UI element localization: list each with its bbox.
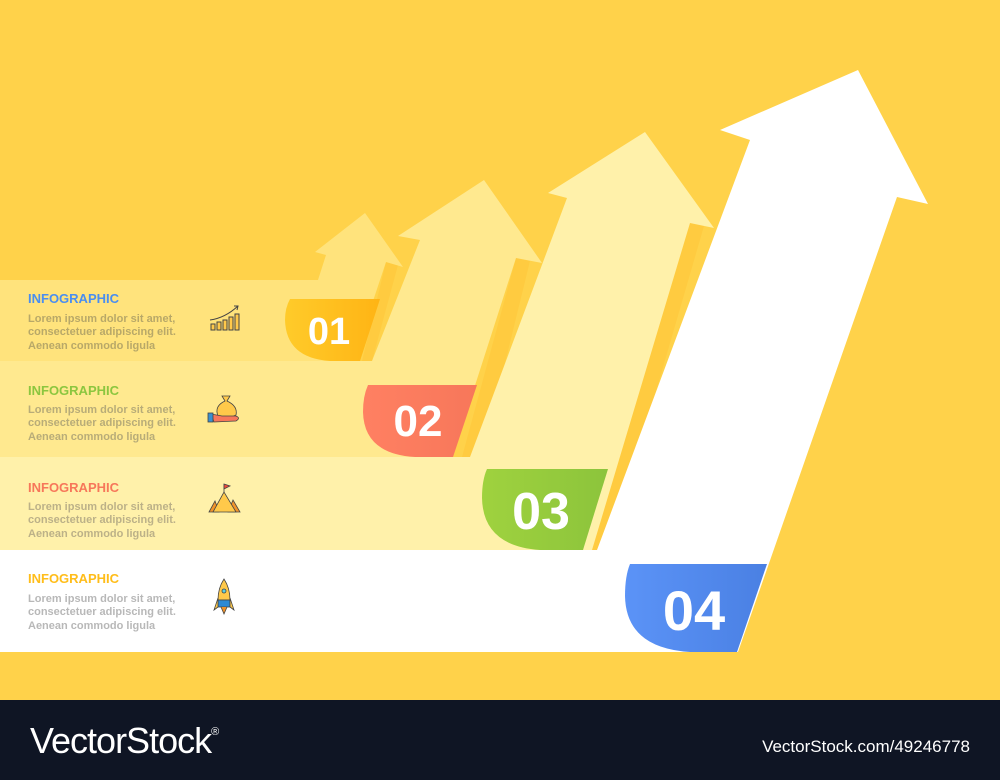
badge 02: 02 [394,397,442,446]
text block 4: INFOGRAPHIC [28,571,120,586]
badge 03 [482,469,608,550]
badge 01: 01 [308,311,350,353]
badge 04 [625,564,767,652]
text block 1: consectetuer adipiscing elit. [28,326,176,338]
footer bar: ® [211,726,219,738]
arrow 1 with band [0,213,403,361]
text block 3 [28,480,176,540]
badge 01 [285,299,380,361]
icon: growth chart [210,306,239,330]
badge 04: 04 [663,579,725,642]
arrow 4 with band [0,70,928,652]
icon: money bag in hand [208,396,238,422]
text block 4: Lorem ipsum dolor sit amet, [28,593,175,605]
text block 4: consectetuer adipiscing elit. [28,606,176,618]
text block 2: INFOGRAPHIC [28,383,120,398]
text block 2: Aenean commodo ligula [28,431,156,443]
text block 1: INFOGRAPHIC [28,291,120,306]
text block 3: consectetuer adipiscing elit. [28,514,176,526]
arrow 3 with band [0,132,714,550]
text block 4 [28,571,176,632]
text block 3: Lorem ipsum dolor sit amet, [28,501,175,513]
text block 2: Lorem ipsum dolor sit amet, [28,404,175,416]
footer bar: VectorStock [30,720,211,761]
badge 03: 03 [512,483,570,541]
badge 02 [363,385,477,457]
footer bar: VectorStock.com/49246778 [762,737,970,756]
text block 3: INFOGRAPHIC [28,480,120,495]
icon: rocket [214,579,234,614]
text block 1 [28,291,176,352]
text block 2 [28,383,176,443]
text block 3: Aenean commodo ligula [28,528,156,540]
icon: mountain with flag [209,484,240,512]
text block 1: Lorem ipsum dolor sit amet, [28,313,175,325]
text block 2: consectetuer adipiscing elit. [28,417,176,429]
footer bar [0,700,1000,780]
arrow 2 with band [0,180,542,457]
text block 1: Aenean commodo ligula [28,340,156,352]
text block 4: Aenean commodo ligula [28,620,156,632]
